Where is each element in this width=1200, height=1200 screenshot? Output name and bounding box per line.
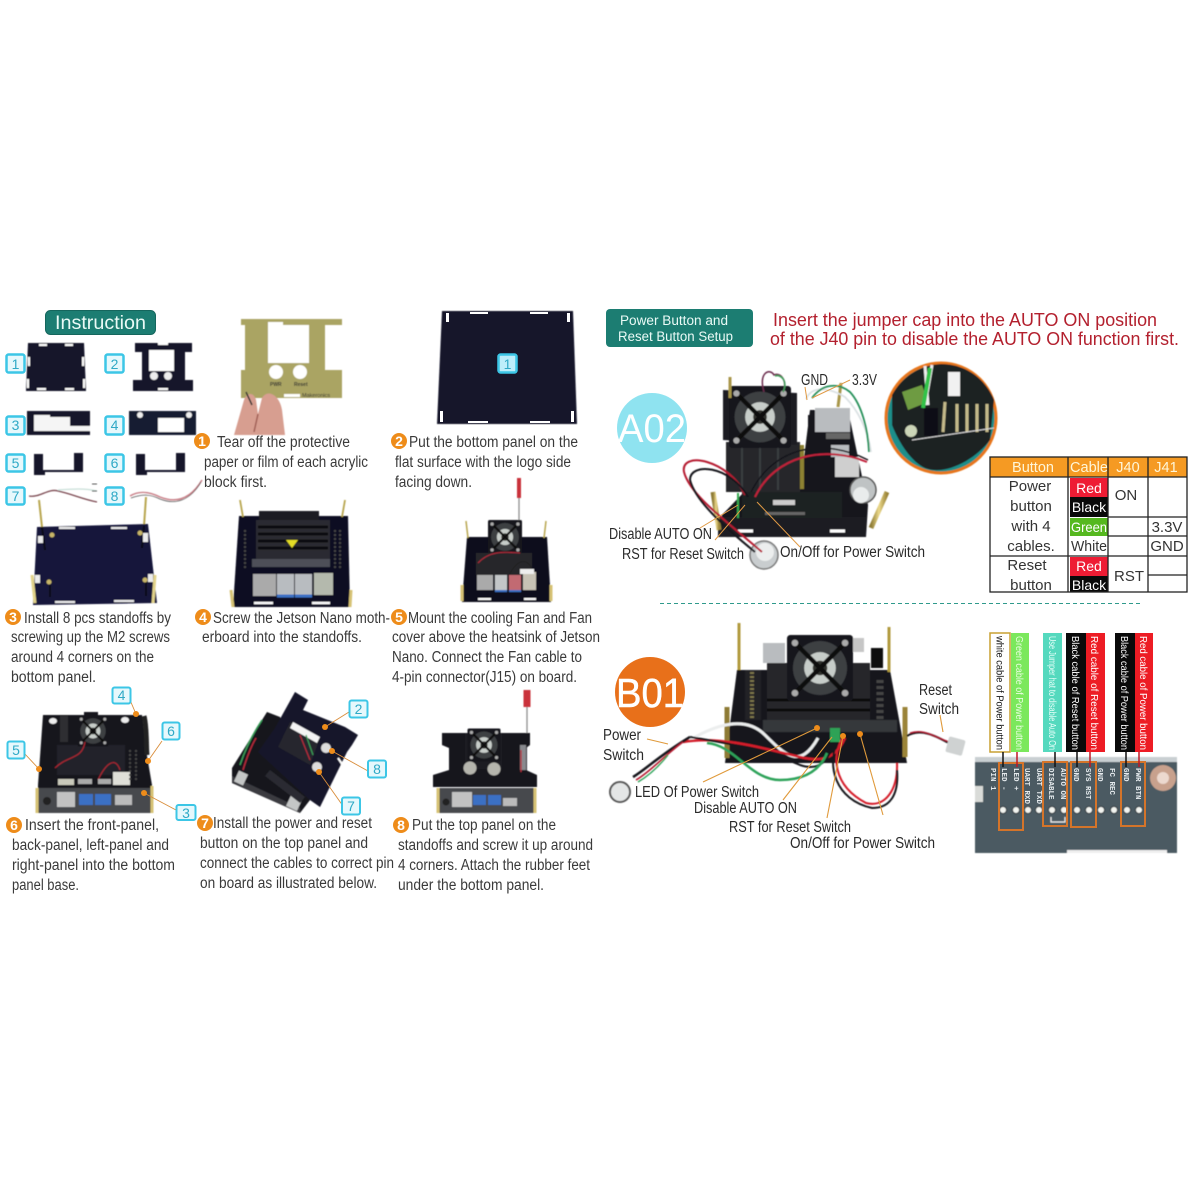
red instruction note: of the J40 pin to disable the AUTO ON function first.	[770, 328, 1179, 349]
tag 1 on panel: 1	[504, 356, 512, 372]
tag 2	[350, 700, 368, 718]
leader lines	[647, 715, 943, 818]
label Reset Switch	[919, 682, 959, 718]
tag 2: 2	[355, 701, 363, 717]
heading: Power Button and Reset Button Setup: Reset Button Setup	[618, 329, 733, 344]
step 2 text	[391, 433, 578, 491]
silkscreen pin names: GND	[1121, 768, 1129, 782]
step 3 number: 3	[9, 609, 17, 625]
photo: assembled case with top panel	[433, 690, 537, 813]
silkscreen pin names: GND	[1071, 768, 1079, 782]
tag 4: 4	[118, 687, 126, 703]
heading: Instruction	[46, 310, 156, 334]
cable legend bars: Red cable of Reset button	[1088, 636, 1100, 750]
label Disable AUTO ON: Disable AUTO ON	[609, 526, 712, 543]
badge: B01: B01	[616, 670, 684, 716]
wires	[684, 372, 871, 552]
step 6 text	[6, 817, 175, 894]
step 6 text: back-panel, left-panel and	[12, 837, 169, 854]
photo: Jetson Nano on standoffs	[231, 500, 351, 607]
silkscreen pin names: SYS RST	[1083, 768, 1091, 800]
silkscreen pin names	[988, 768, 1141, 805]
step 6 text: Insert the front-panel,	[25, 817, 159, 834]
step 6 number: 6	[10, 817, 18, 833]
step 4 number: 4	[199, 609, 207, 625]
badge: B01	[615, 657, 685, 727]
heading: Power Button and Reset Button Setup: Power Button and	[620, 313, 728, 328]
step 6 text: panel base.	[12, 877, 79, 894]
power switch	[610, 782, 630, 802]
part 6 right panel	[136, 453, 185, 475]
label On/Off for Power Switch: On/Off for Power Switch	[790, 835, 935, 852]
step 3 text: bottom panel.	[11, 669, 96, 686]
photo: B01 board wiring	[603, 623, 966, 852]
table text	[1007, 478, 1184, 594]
table text: ON	[1115, 487, 1137, 504]
silkscreen pin names: GND	[1095, 768, 1103, 782]
step 8 text: standoffs and screw it up around	[398, 837, 593, 854]
cable legend bars: Black cable of Power button	[1118, 636, 1130, 750]
standoffs	[739, 623, 889, 672]
callout dots	[36, 711, 151, 796]
table header: J41	[1154, 460, 1178, 476]
photo: cooling fan mounted	[462, 478, 551, 602]
step 3 number	[5, 609, 21, 625]
step 1 number	[194, 433, 210, 449]
tag 6: 6	[167, 723, 175, 739]
tag 5: 5	[12, 742, 20, 758]
cable legend bars: Red cable of Power button	[1137, 636, 1149, 750]
photo: A02 board wiring	[609, 372, 925, 569]
tag 3: 3	[182, 805, 190, 821]
tag 4: 4	[111, 417, 119, 433]
step 5 text	[391, 609, 600, 686]
label Power Switch	[603, 727, 644, 764]
tag 8	[368, 760, 386, 778]
step 2 number	[391, 433, 407, 449]
label Power Switch: Switch	[603, 747, 644, 764]
step 7 number: 7	[201, 815, 209, 831]
label RST for Reset Switch: RST for Reset Switch	[622, 546, 744, 563]
tag 2: 2	[111, 356, 119, 372]
cable colour cells: Black	[1072, 499, 1107, 515]
step 7 text: connect the cables to correct pin	[200, 855, 394, 872]
panel: parts list	[6, 343, 202, 504]
heatsink	[726, 442, 800, 492]
table text: Reset	[1007, 557, 1047, 574]
switch front	[750, 541, 778, 569]
step 5 text: cover above the heatsink of Jetson	[392, 629, 600, 646]
tag 8: 8	[373, 761, 381, 777]
cable colour cells: Red	[1076, 480, 1102, 496]
rear ports	[763, 643, 785, 663]
label On/Off for Power Switch: On/Off for Power Switch	[780, 544, 925, 561]
step 5 text: Mount the cooling Fan and Fan	[408, 610, 592, 627]
tag 3	[6, 416, 24, 434]
step 8 text	[393, 817, 593, 894]
cable colour cells: Green	[1071, 519, 1107, 535]
photo: standoffs on bottom panel	[32, 497, 157, 605]
tag 6: 6	[111, 455, 119, 471]
silkscreen pin names: DISABLE	[1046, 768, 1054, 800]
table header	[990, 457, 1187, 477]
silkscreen pin names: UART TXD	[1034, 768, 1042, 805]
pointer arrows	[1003, 752, 1139, 767]
table header: J40	[1116, 460, 1140, 476]
step 8 text: under the bottom panel.	[398, 877, 544, 894]
cable legend bars	[990, 633, 1153, 752]
step 4 number	[195, 609, 211, 625]
part 5 left panel	[34, 453, 83, 475]
cable colour cells: White	[1071, 538, 1107, 555]
step 8 text: 4 corners. Attach the rubber feet	[398, 857, 591, 874]
cable colour cells: Red	[1076, 558, 1102, 574]
step 2 text: Put the bottom panel on the	[409, 434, 578, 451]
tag 8: 8	[111, 488, 119, 504]
table text: Power	[1009, 478, 1051, 495]
pin diagram: J40 header with cable legend	[975, 633, 1177, 853]
step 5 number	[391, 609, 407, 625]
step 1 text	[194, 433, 368, 491]
heatsink	[767, 663, 870, 723]
board components	[742, 492, 842, 518]
tag 2	[106, 354, 124, 372]
table text: cables.	[1007, 538, 1055, 555]
step 2 number: 2	[395, 433, 403, 449]
cable legend bars: Green cable of Power button	[1013, 636, 1025, 750]
heading: Instruction: Instruction	[55, 313, 146, 334]
silkscreen pin names: LED -	[999, 768, 1007, 791]
step 8 text: Put the top panel on the	[412, 817, 556, 834]
label RST for Reset Switch: RST for Reset Switch	[729, 819, 851, 836]
step 2 text: flat surface with the logo side	[395, 454, 571, 471]
table text: RST	[1114, 568, 1144, 585]
tag 8	[106, 488, 124, 504]
table header: Cable	[1070, 460, 1108, 476]
tag 3	[176, 805, 196, 821]
step 5 text: 4-pin connector(J15) on board.	[392, 669, 577, 686]
step 8 number	[393, 817, 409, 833]
cable legend bars: Use Jumper hat to disable Auto On	[1046, 636, 1058, 750]
tag 6	[106, 454, 124, 472]
tag 7: 7	[12, 488, 20, 504]
silkscreen pin names: PIN 1	[988, 768, 996, 791]
tag 6	[162, 722, 180, 740]
step 7 text: on board as illustrated below.	[200, 875, 377, 892]
step 4 text	[195, 609, 390, 646]
fan	[787, 635, 853, 701]
label GND: GND	[801, 372, 828, 389]
cable colour cells	[1070, 478, 1108, 593]
step 7 text: Install the power and reset	[213, 815, 373, 832]
red instruction note: Insert the jumper cap into the AUTO ON position	[773, 309, 1157, 330]
table header: Button	[1012, 460, 1054, 476]
heading: Power Button and Reset Button Setup	[606, 309, 753, 347]
step 1 text: paper or film of each acrylic	[204, 454, 368, 471]
photo: installing buttons on top panel	[232, 692, 386, 814]
step 7 number	[197, 815, 213, 831]
silkscreen pin names: UART RXD	[1022, 768, 1030, 805]
pin markers	[814, 725, 863, 739]
tag 1: 1	[12, 356, 20, 372]
silkscreen pin names: LED +	[1011, 768, 1019, 791]
reset switch	[945, 736, 966, 756]
step 1 text: Tear off the protective	[217, 434, 350, 451]
table text: 3.3V	[1152, 519, 1182, 536]
part 1 bottom panel	[26, 343, 86, 391]
tag 5: 5	[12, 455, 20, 471]
inset photo: jumper cap close-up	[886, 363, 996, 473]
callout leaders	[24, 700, 176, 810]
cable legend bars: Black cable of Reset button	[1069, 636, 1081, 750]
standoffs	[713, 492, 719, 530]
label Disable AUTO ON: Disable AUTO ON	[694, 800, 797, 817]
wires	[633, 724, 952, 808]
step 4 text: Screw the Jetson Nano moth-	[213, 610, 390, 627]
callout dots	[316, 724, 335, 775]
step 4 text: erboard into the standoffs.	[202, 629, 362, 646]
step 7 text	[197, 815, 394, 892]
label Power Switch: Power	[603, 727, 641, 744]
tag 7	[342, 798, 360, 814]
leader lines	[700, 380, 850, 547]
label Reset Switch: Switch	[919, 701, 959, 718]
cable legend bars: white cable of Power button	[994, 635, 1006, 750]
part 7 power button cable	[29, 484, 97, 502]
part 2 top panel	[133, 343, 193, 391]
photo: bottom panel	[437, 311, 577, 424]
part 8 reset button cable	[130, 480, 202, 502]
step 3 text: around 4 corners on the	[11, 649, 154, 666]
step 1 text: block first.	[204, 474, 267, 491]
switch right	[850, 477, 876, 503]
step 8 number: 8	[397, 817, 405, 833]
step 6 text: right-panel into the bottom	[12, 857, 175, 874]
tag 5	[8, 742, 24, 758]
photo: peeling film from acrylic: Makeronics	[302, 393, 330, 399]
badge: A02	[617, 393, 687, 463]
label 3.3V: 3.3V	[852, 372, 878, 389]
step 3 text	[5, 609, 171, 686]
table text: button	[1010, 498, 1052, 515]
tag 1	[6, 354, 24, 372]
silkscreen pin names: PWR BTN	[1133, 768, 1141, 800]
base plate	[725, 670, 907, 763]
label LED Of Power Switch: LED Of Power Switch	[635, 784, 759, 801]
photo: peeling film from acrylic	[234, 319, 342, 435]
photo: peeling film from acrylic: PWR	[270, 382, 282, 388]
part 4 back panel	[129, 411, 196, 435]
cable colour cells: Black	[1072, 577, 1107, 593]
tag 4	[106, 416, 124, 434]
table: A02 button pins	[990, 457, 1187, 594]
silkscreen pin names: AUTO ON	[1058, 768, 1066, 800]
step 2 text: facing down.	[395, 474, 472, 491]
table text: with 4	[1010, 518, 1051, 535]
tag 5	[6, 454, 24, 472]
red instruction note	[770, 309, 1179, 349]
part 3 front panel	[27, 411, 90, 435]
step 3 text: Install 8 pcs standoffs by	[24, 610, 171, 627]
table text: button	[1010, 577, 1052, 594]
orange pin group outlines	[999, 762, 1145, 830]
silkscreen pin names: FC REC	[1107, 768, 1115, 796]
table text: GND	[1150, 538, 1184, 555]
tag 3: 3	[12, 417, 20, 433]
callout leaders	[319, 712, 368, 806]
fan	[723, 390, 797, 445]
jumper terminal	[830, 728, 840, 742]
step 5 text: Nano. Connect the Fan cable to	[392, 649, 582, 666]
step 6 number	[6, 817, 22, 833]
table grid	[990, 457, 1187, 592]
step 5 number: 5	[395, 609, 403, 625]
photo: side panels inserted	[8, 687, 196, 821]
step 1 number: 1	[198, 433, 206, 449]
tag 7	[6, 488, 24, 504]
label Reset Switch: Reset	[919, 682, 953, 699]
base plate	[718, 410, 868, 537]
step 7 text: button on the top panel and	[200, 835, 368, 852]
board photo	[975, 757, 1177, 853]
step 3 text: screwing up the M2 screws	[11, 629, 170, 646]
photo: peeling film from acrylic: Reset	[294, 382, 308, 388]
badge: A02: A02	[618, 407, 686, 451]
tag 7: 7	[347, 798, 355, 814]
tag 4	[112, 687, 130, 704]
